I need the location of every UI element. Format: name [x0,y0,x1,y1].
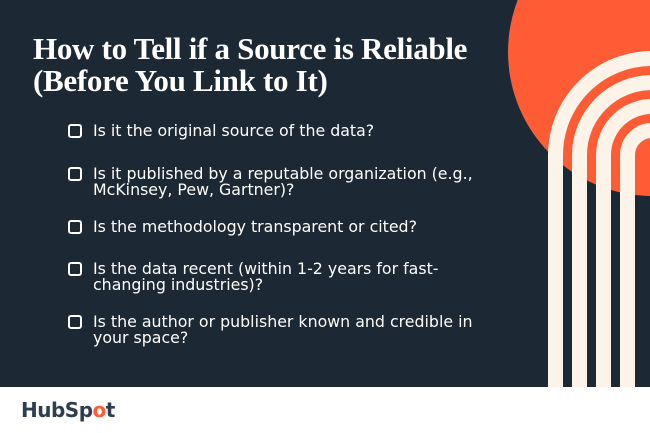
checklist item 5 [68,312,472,347]
checklist item 5: Is the author or publisher known and credible in [93,312,472,331]
checklist item 2: Is it published by a reputable organization (e.g., [93,164,473,183]
title: (Before You Link to It) [33,63,328,98]
checklist item 5: your space? [93,328,188,347]
checklist item 4 [68,259,438,294]
title: How to Tell if a Source is Reliable [33,31,467,66]
checklist item 2 [68,164,473,199]
checklist item 2: McKinsey, Pew, Gartner)? [93,180,294,199]
checklist item 3: Is the methodology transparent or cited? [93,217,417,236]
HubSpot logo: HubSpot [21,398,115,422]
title [33,31,467,98]
checklist item 1: Is it the original source of the data? [93,121,374,140]
checklist item 4: changing industries)? [93,275,263,294]
checklist item 4: Is the data recent (within 1-2 years for fast- [93,259,438,278]
